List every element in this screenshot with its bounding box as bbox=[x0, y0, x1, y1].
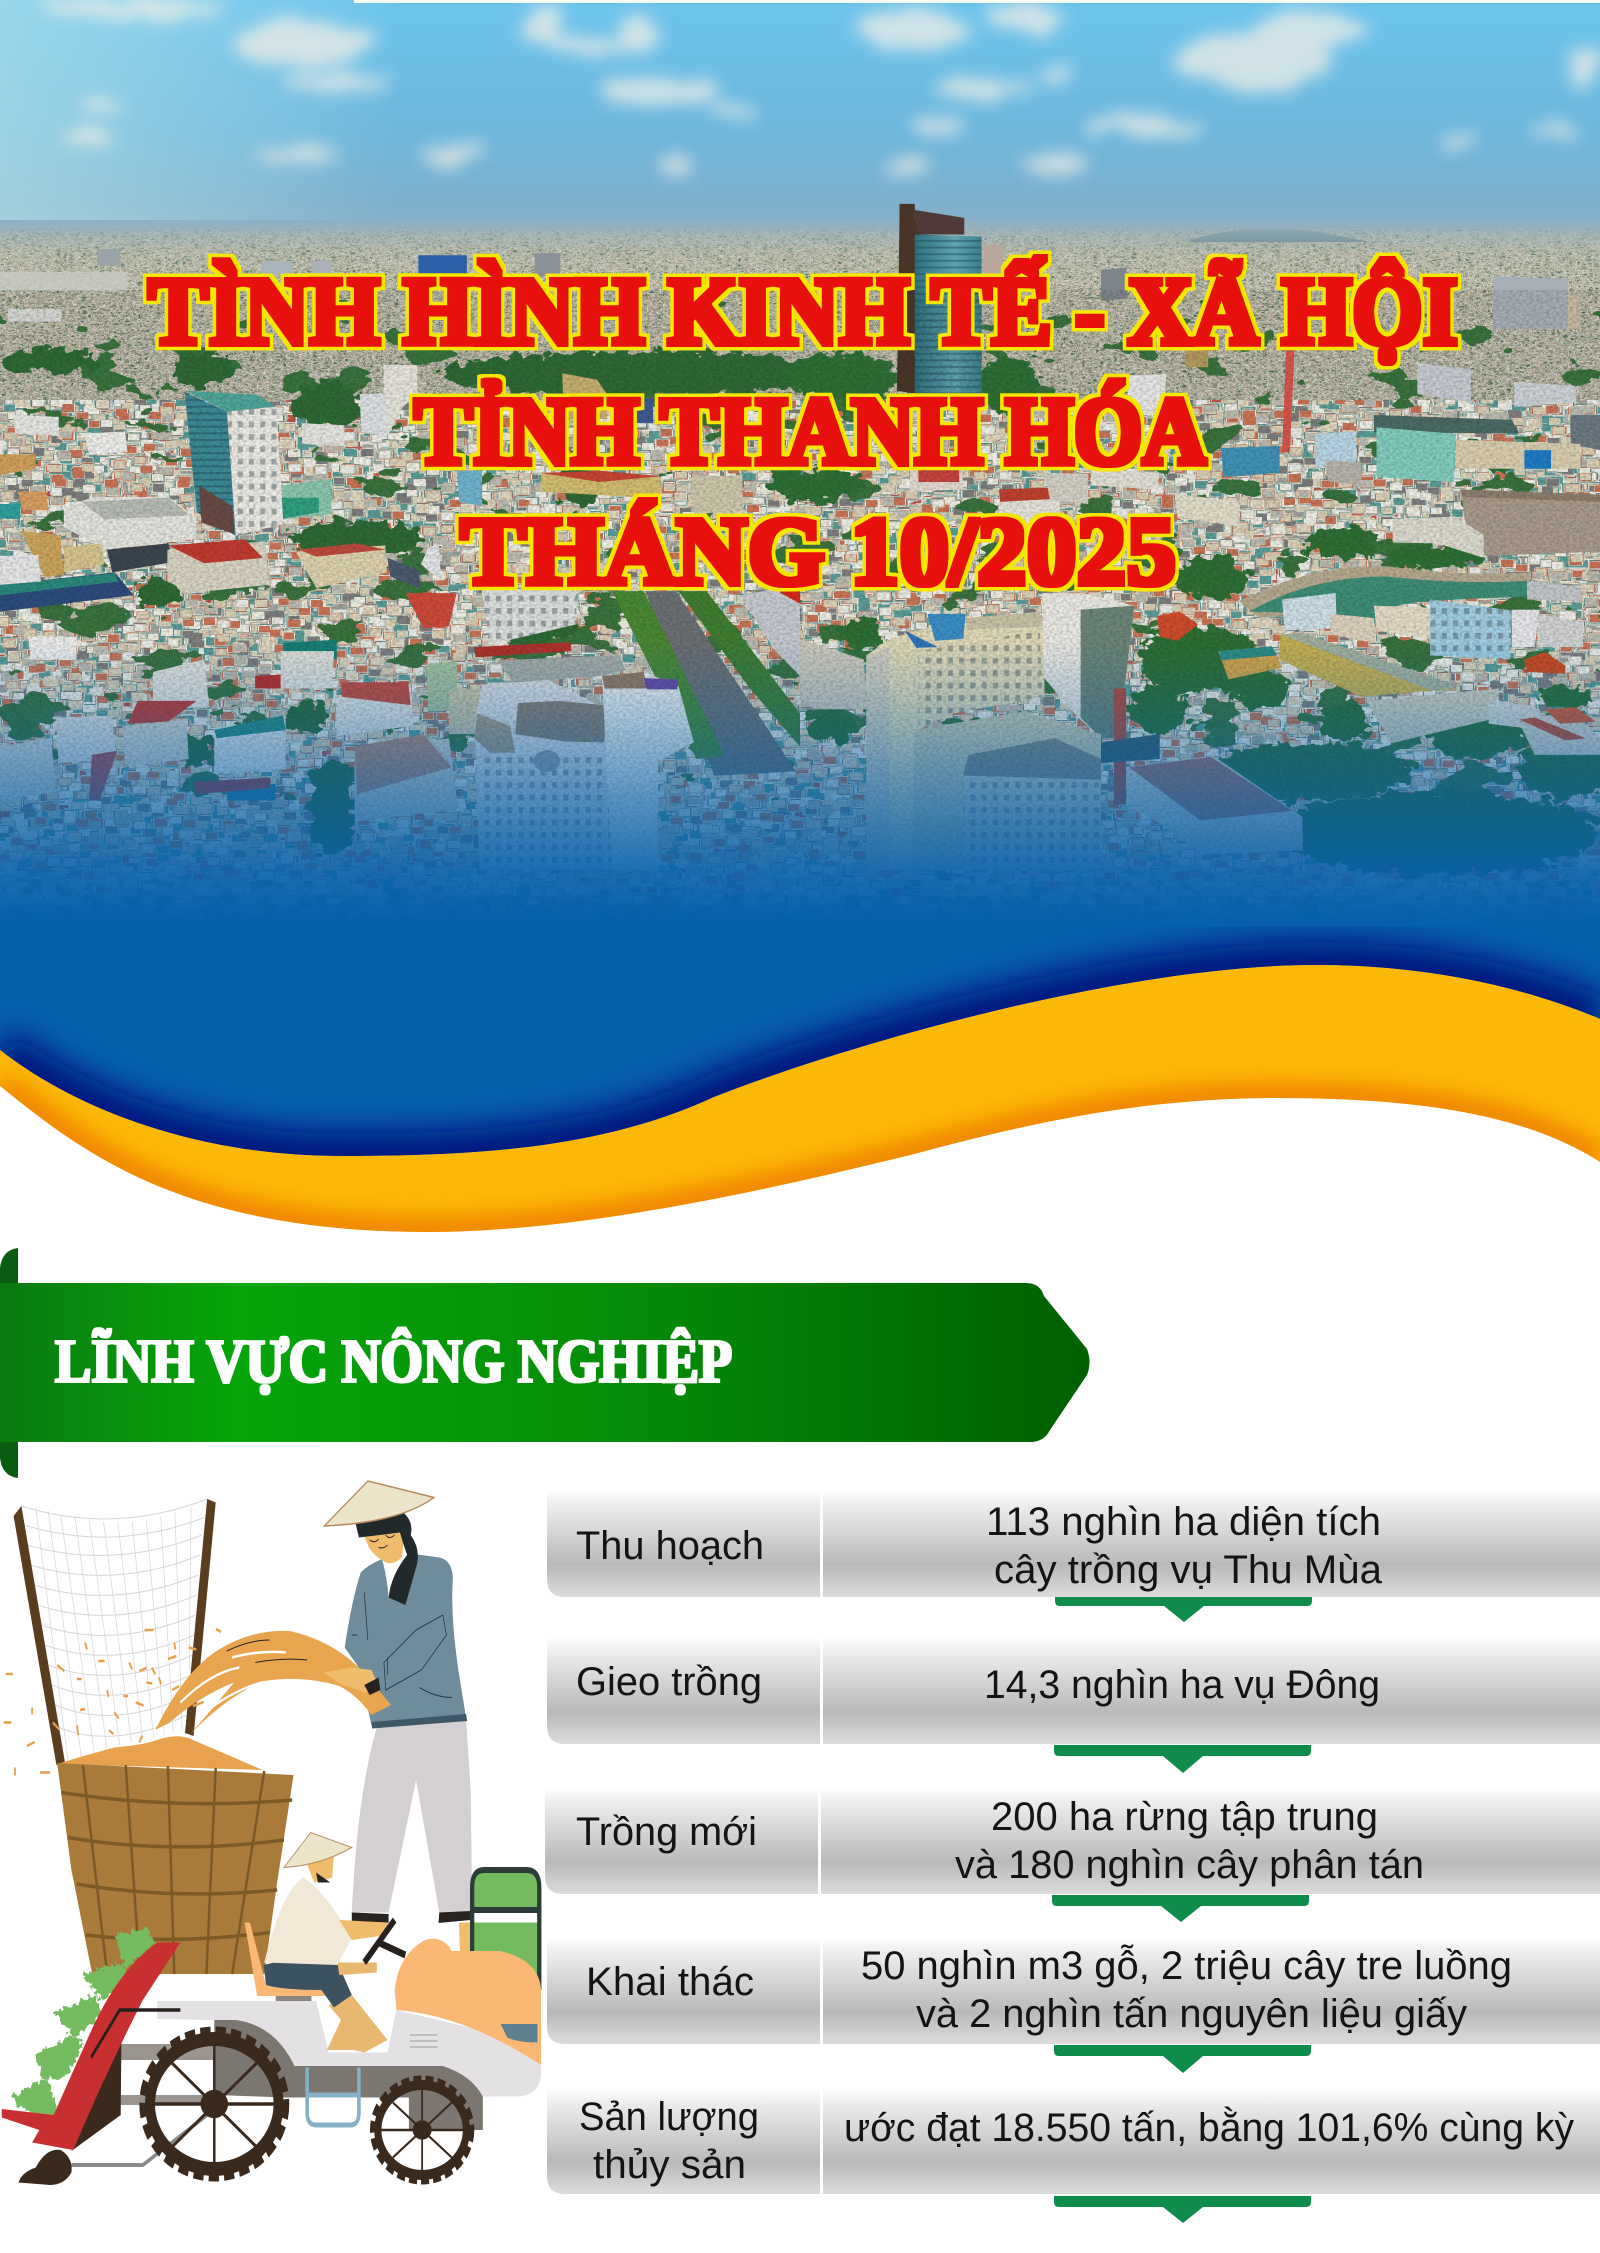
far towers bbox=[984, 245, 1600, 450]
row: Trồng mới: và 180 nghìn cây phân tán bbox=[955, 1843, 1424, 1887]
row: Trồng mới bbox=[545, 1788, 1600, 1894]
title: TÌNH HÌNH KINH TẾ - XÃ HỘI bbox=[148, 256, 1458, 366]
left half buildings bbox=[0, 249, 832, 870]
section banner: agriculture bbox=[0, 1248, 1090, 1478]
row: Gieo trồng bbox=[547, 1637, 1600, 1744]
arrow tab 1 bbox=[1055, 1597, 1312, 1622]
header photo: city skyline bbox=[0, 0, 1600, 960]
banner ribbon tabs bbox=[0, 1248, 18, 1478]
seedlings bbox=[11, 1928, 155, 2118]
curved hotel and lake bbox=[1157, 489, 1600, 674]
far city band bbox=[0, 220, 1600, 400]
data table: agriculture figures bbox=[545, 1490, 1600, 2223]
title: TỈNH THANH HÓA bbox=[414, 378, 1206, 486]
row: Sản lượng thủy sản bbox=[547, 2088, 1600, 2194]
row: Trồng mới: 200 ha rừng tập trung bbox=[991, 1795, 1378, 1839]
towers near title bbox=[360, 365, 742, 514]
blue wave navy edge bbox=[0, 965, 1600, 1156]
row: Gieo trồng: 14,3 nghìn ha vụ Đông bbox=[984, 1663, 1380, 1707]
title bbox=[148, 256, 1458, 606]
driver bbox=[245, 1832, 405, 2052]
row: Gieo trồng: Gieo trồng bbox=[576, 1660, 762, 1704]
banner heading: LĨNH VỰC NÔNG NGHIỆP bbox=[55, 1328, 732, 1396]
flying grains bbox=[4, 1629, 221, 1776]
hotel foreground bbox=[800, 593, 1303, 870]
row: Thu hoạch: 113 nghìn ha diện tích bbox=[986, 1500, 1381, 1544]
sky with clouds bbox=[0, 0, 1600, 240]
woman with straw bbox=[155, 1481, 472, 1952]
tractor body bbox=[71, 1939, 541, 2165]
large wheel bbox=[145, 2034, 284, 2174]
foreground blocks bbox=[0, 589, 694, 870]
yellow wave bbox=[0, 960, 1600, 1240]
right half buildings bbox=[769, 204, 1600, 875]
row: Khai thác: Khai thác bbox=[586, 1960, 754, 2004]
flat building and solar roof bbox=[0, 415, 344, 612]
arrow tab 4 bbox=[1054, 2045, 1311, 2073]
hotel tower bbox=[185, 391, 284, 536]
school and low blocks bbox=[1218, 633, 1600, 755]
blue gradient band bbox=[0, 640, 1600, 1156]
small wheel bbox=[374, 2081, 470, 2179]
far buildings bbox=[0, 249, 560, 322]
title: THÁNG 10/2025 bbox=[460, 498, 1176, 606]
teal office buildings bbox=[910, 415, 1581, 527]
row: Khai thác: và 2 nghìn tấn nguyên liệu giấy bbox=[916, 1992, 1467, 2036]
row: Khai thác bbox=[547, 1938, 1600, 2044]
row: Sản lượng thủy sản: thủy sản bbox=[593, 2143, 746, 2187]
row: Thu hoạch: cây trồng vụ Thu Mùa bbox=[994, 1548, 1383, 1592]
red planting arm bbox=[2, 1942, 180, 2185]
arrow tab 2 bbox=[1054, 1745, 1311, 1773]
seedling rack bbox=[472, 1870, 539, 1990]
near city texture bbox=[0, 300, 1600, 960]
street and tree line bbox=[612, 572, 800, 776]
banner body bbox=[0, 1283, 1090, 1442]
net and posts bbox=[14, 1499, 216, 1765]
arrow tab 5 bbox=[1054, 2196, 1311, 2223]
row: Thu hoạch: Thu hoạch bbox=[576, 1524, 764, 1568]
arrow tab 3 bbox=[1052, 1895, 1309, 1922]
row: Thu hoạch bbox=[547, 1490, 1600, 1597]
fine photo grain bbox=[0, 290, 1600, 930]
basket with grain bbox=[57, 1736, 294, 1974]
main tower bbox=[897, 204, 1296, 452]
row: Trồng mới: Trồng mới bbox=[576, 1810, 757, 1854]
red roof blocks bbox=[167, 479, 441, 593]
row: Sản lượng thủy sản: ước đạt 18.550 tấn, bằng 101,6% cùng kỳ bbox=[844, 2105, 1574, 2150]
row: Sản lượng thủy sản: Sản lượng bbox=[579, 2095, 759, 2139]
illustration: farmers on rice transplanter bbox=[2, 1481, 541, 2185]
row: Khai thác: 50 nghìn m3 gỗ, 2 triệu cây tre luồng bbox=[861, 1943, 1512, 1988]
